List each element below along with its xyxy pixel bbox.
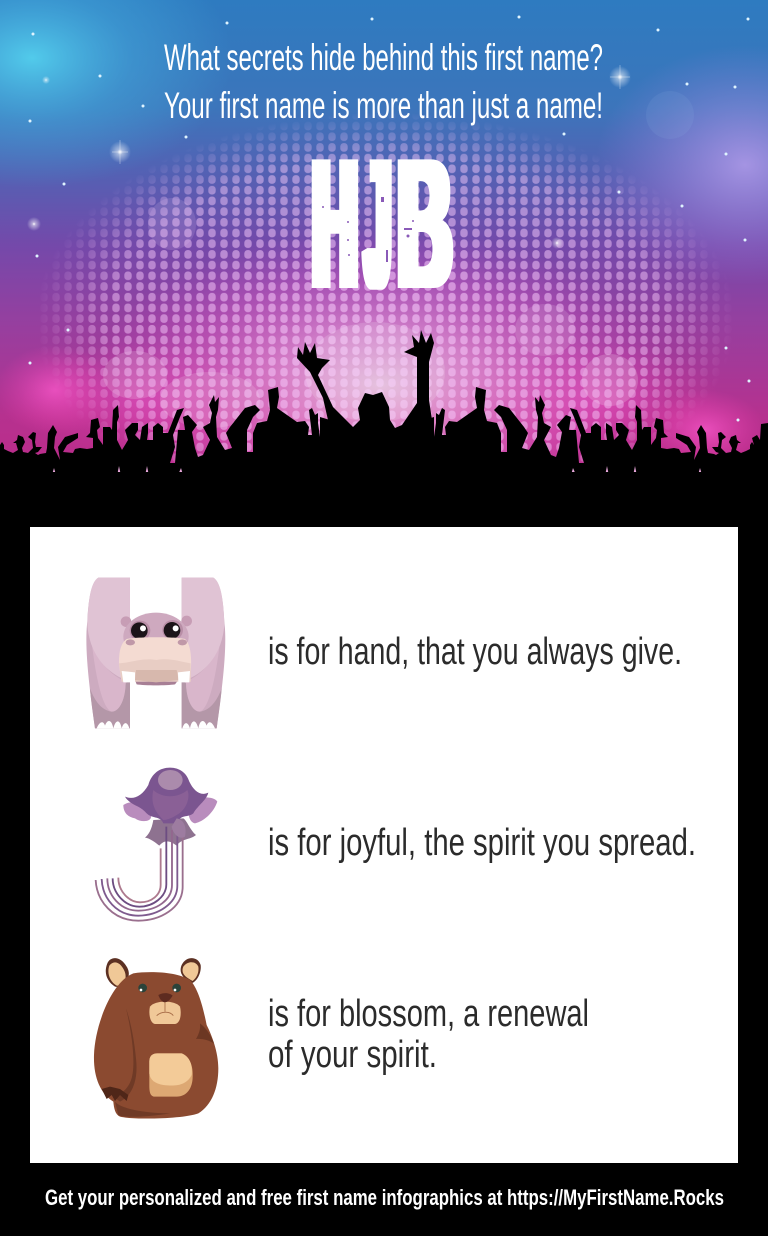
- sparkles: [27, 16, 750, 422]
- right side of crowd: [409, 387, 754, 485]
- text: B line: is for blossom, a renewal: [268, 993, 589, 1035]
- icon: jellyfish letter J: [96, 768, 217, 921]
- centre figure with raised hands: [297, 330, 440, 480]
- ground block: [0, 472, 768, 530]
- text: B line: of your spirit.: [268, 1034, 437, 1076]
- big initials HJB: J: [366, 120, 390, 326]
- infographic canvas: B: [398, 120, 452, 326]
- stage background: [0, 0, 768, 463]
- left side of crowd: [0, 387, 345, 485]
- white content panel: [30, 527, 738, 1163]
- icon: bear letter B: [94, 958, 218, 1119]
- text: B line: [268, 993, 589, 1076]
- icon: hippo letter H: [86, 578, 225, 728]
- headline: [164, 37, 603, 126]
- far right crowd edge: [752, 423, 768, 485]
- big initials HJB: H: [312, 120, 357, 326]
- crowd silhouette: [0, 330, 768, 530]
